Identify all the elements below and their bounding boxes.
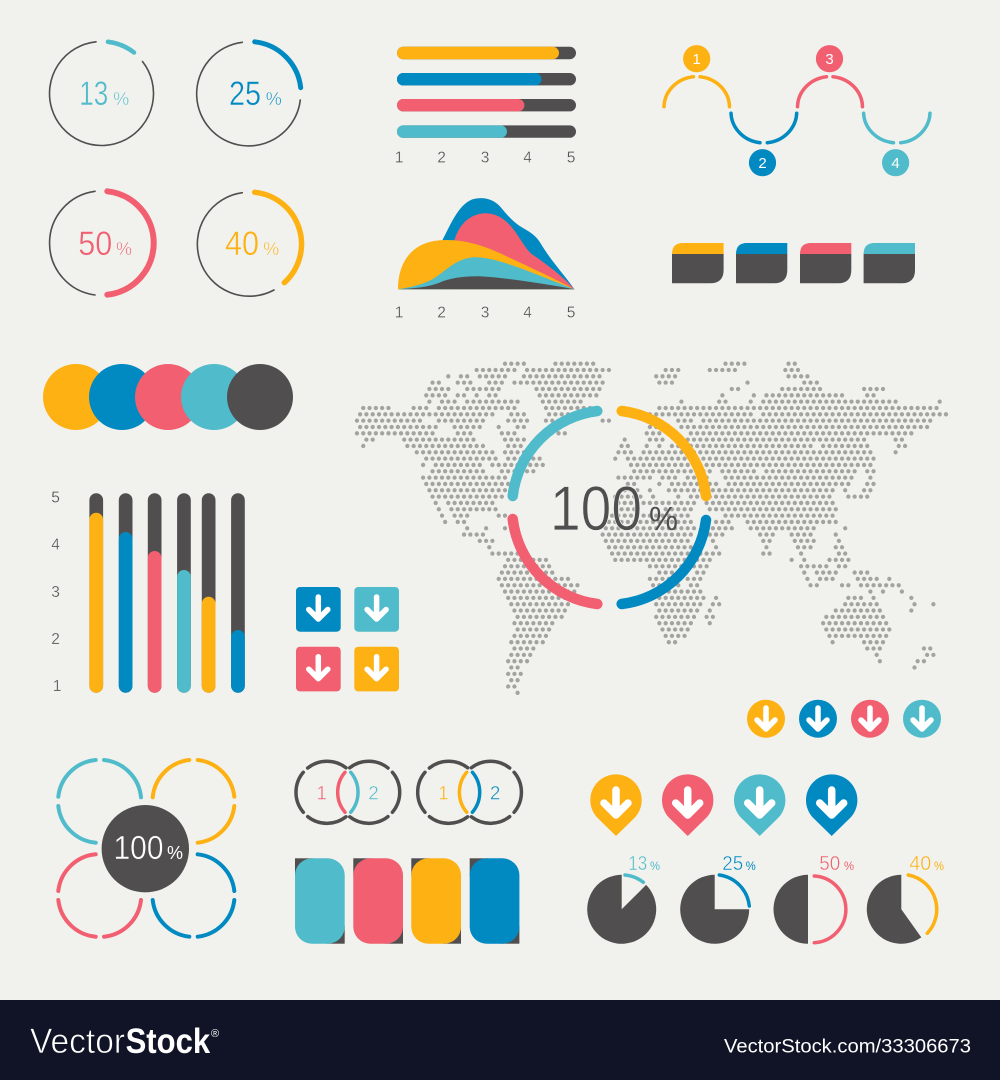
footer bar: Stock <box>126 1022 211 1061</box>
round arrow buttons <box>747 700 941 738</box>
horizontal bar chart: 5 <box>567 150 575 167</box>
stacked area chart: 5 <box>567 305 575 322</box>
timeline step 2: 2 <box>758 155 767 172</box>
progress ring: 40%: % <box>263 239 279 259</box>
horizontal bar chart: 4 <box>523 150 532 167</box>
footer bar: ® <box>211 1028 219 1040</box>
timeline step 4: 4 <box>891 155 900 172</box>
vertical bar chart: 3 <box>51 584 60 601</box>
timeline step 2 <box>731 113 797 176</box>
colour swatch circles <box>43 364 293 430</box>
pie chart: 40%: % <box>934 859 944 873</box>
pie chart: 25%: % <box>746 859 756 873</box>
footer bar: Vector <box>30 1022 125 1061</box>
red ring <box>58 854 141 937</box>
progress ring: 13%: 13 <box>79 75 108 113</box>
pie chart: 40% <box>867 853 944 944</box>
tab cards <box>672 243 915 283</box>
dotted world map <box>357 364 946 693</box>
pie chart: 50% <box>774 853 854 944</box>
venn pair: red and teal: 1 <box>316 783 327 804</box>
pie chart: 40%: 40 <box>909 853 931 875</box>
wave timeline with numbered nodes <box>664 45 930 176</box>
vertical bar chart <box>51 490 245 695</box>
progress ring: 50%: 50 <box>78 225 112 263</box>
footer bar <box>0 1000 1000 1080</box>
rounded colour cards <box>295 858 519 944</box>
horizontal bar chart: 3 <box>481 150 489 167</box>
square arrow buttons <box>296 587 399 691</box>
progress ring: 40% <box>197 192 302 296</box>
timeline step 4 <box>864 113 930 176</box>
pie chart: 50%: % <box>844 859 854 873</box>
vertical bar chart: 2 <box>51 631 60 648</box>
yellow ring <box>153 760 234 843</box>
progress ring: 13%: % <box>113 89 129 109</box>
pie chart: 25%: 25 <box>722 853 743 875</box>
central 100% ring: 100 <box>550 474 642 544</box>
timeline step 1: 1 <box>693 51 701 68</box>
vertical bar chart: 1 <box>53 678 61 695</box>
stacked area chart: 3 <box>481 305 489 322</box>
vertical bar chart: 5 <box>51 490 60 507</box>
pie chart: 13% <box>587 853 660 944</box>
stacked area chart: 1 <box>395 305 403 322</box>
centre disc with 100%: 100 <box>114 829 164 866</box>
horizontal bar chart: 2 <box>437 150 446 167</box>
pie chart: 13%: % <box>650 859 660 873</box>
timeline step 3: 3 <box>825 51 834 68</box>
blue ring <box>153 854 234 937</box>
progress ring: 50%: % <box>116 239 132 259</box>
vertical bar chart: 4 <box>51 537 60 554</box>
stacked area chart <box>395 198 575 322</box>
horizontal bar chart <box>395 47 576 167</box>
horizontal bar chart: 1 <box>395 150 403 167</box>
pie chart: 50%: 50 <box>819 853 840 875</box>
footer bar: VectorStock.com/33306673 <box>724 1037 971 1058</box>
venn pair: red and teal: 2 <box>368 783 379 804</box>
centre disc with 100%: % <box>167 843 183 863</box>
venn pair: yellow and blue: 1 <box>438 783 449 804</box>
timeline step 3 <box>798 45 862 107</box>
progress ring: 40%: 40 <box>225 225 259 263</box>
central 100% ring: % <box>649 500 678 537</box>
venn pair: red and teal <box>296 761 400 823</box>
central 100% ring <box>513 411 706 604</box>
stacked area chart: 4 <box>523 305 532 322</box>
map pin arrows <box>590 774 857 836</box>
stacked area chart: 2 <box>437 305 446 322</box>
pie chart: 13%: 13 <box>628 853 647 875</box>
centre disc with 100% <box>102 805 189 892</box>
timeline step 1 <box>664 45 730 107</box>
progress ring: 50% <box>50 191 154 295</box>
venn pair: yellow and blue: 2 <box>490 783 500 804</box>
progress ring: 25%: 25 <box>229 75 261 113</box>
four-ring 100% diagram <box>58 760 234 937</box>
pie chart: 25% <box>680 853 756 944</box>
teal ring <box>58 760 141 843</box>
progress ring: 25%: % <box>266 89 282 109</box>
progress ring: 25% <box>197 42 301 146</box>
progress ring: 13% <box>50 42 154 146</box>
venn pair: yellow and blue <box>418 761 521 823</box>
